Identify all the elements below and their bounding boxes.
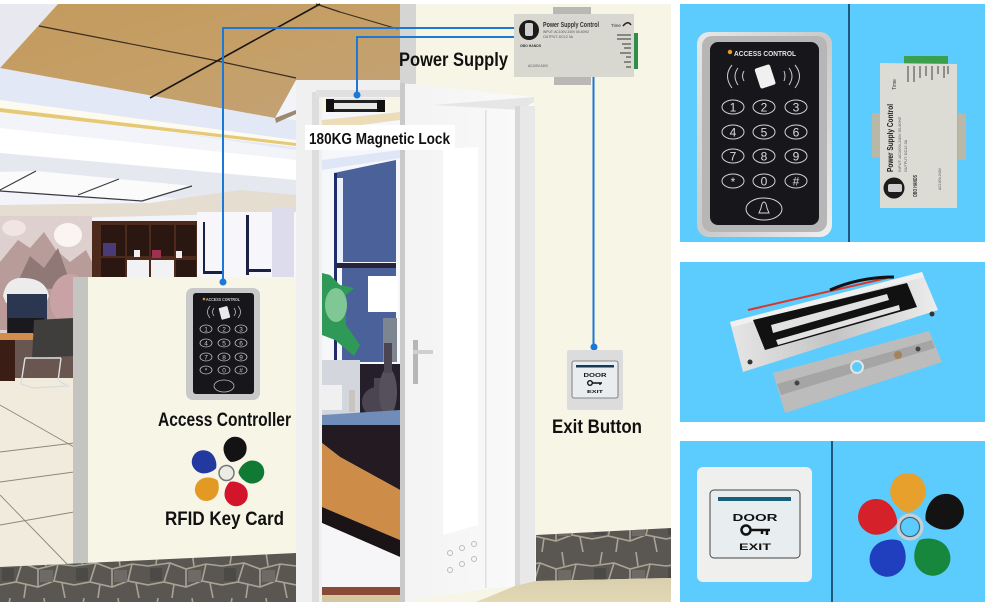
power supply unit (872, 56, 966, 208)
label: rfid key card: RFID Key Card (165, 509, 284, 530)
label: power supply: Power Supply (399, 50, 508, 71)
power supply unit: OBO HANDS (913, 175, 919, 197)
keypad controller: 0 (761, 174, 768, 188)
exit button on wall (567, 350, 623, 410)
keypad controller: 7 (730, 150, 737, 164)
access controller on wall: 1 (204, 326, 208, 334)
access controller on wall: 7 (204, 354, 208, 362)
label: magnetic lock (305, 125, 455, 150)
keypad controller: 4 (730, 126, 737, 140)
power supply on wall: Time (611, 23, 621, 28)
label: access controller: Access Controller (158, 410, 291, 431)
keypad controller: # (793, 174, 800, 188)
access controller on wall: 8 (222, 354, 226, 362)
wooden ceiling (0, 4, 400, 123)
right wall (416, 4, 671, 529)
open door (400, 83, 535, 602)
power supply unit: Time (892, 79, 898, 90)
power supply on wall: Power Supply Control (543, 22, 599, 29)
stone base left (0, 553, 296, 602)
panel: magnetic lock (680, 262, 985, 422)
access controller on wall: 4 (204, 340, 208, 348)
power supply on wall: OUTPUT: DC12 3A (543, 35, 574, 39)
keypad controller: ACCESS CONTROL (734, 51, 797, 58)
power supply on wall: AC100V-240V (528, 64, 549, 68)
exit button: EXIT (739, 542, 772, 552)
key fobs (854, 473, 969, 584)
office desk and chairs (0, 278, 73, 388)
access controller on wall (186, 288, 260, 400)
power supply unit: Power Supply Control (885, 104, 895, 172)
mural (0, 220, 92, 330)
access controller on wall: 5 (222, 340, 226, 348)
keypad controller: 3 (793, 100, 800, 114)
panel: installation scene (0, 4, 671, 602)
grey column (400, 4, 416, 84)
label: exit button: Exit Button (552, 417, 642, 438)
access controller on wall: 0 (222, 368, 226, 374)
shelving unit (92, 221, 198, 278)
access controller on wall: 6 (239, 340, 243, 348)
armature plate (773, 331, 942, 413)
exit button (697, 467, 812, 582)
label: magnetic lock: 180KG Magnetic Lock (309, 131, 450, 148)
access controller on wall: 2 (222, 326, 226, 334)
floor left (0, 378, 74, 570)
electromagnetic lock (730, 272, 938, 372)
interior room seen through door (322, 112, 400, 602)
access controller on wall: 3 (239, 326, 243, 334)
keypad controller: 2 (761, 100, 768, 114)
window mullions (197, 207, 296, 277)
access controller on wall: 9 (239, 354, 243, 362)
power supply unit: AC100V-240V (938, 167, 942, 190)
keypad controller (697, 32, 832, 237)
power supply on wall (514, 7, 638, 85)
left door frame (296, 80, 400, 602)
floor right (476, 578, 671, 602)
keypad controller: 5 (761, 126, 768, 140)
power supply unit: OUTPUT: DC12 3A (903, 140, 908, 172)
icon: rfid key fobs small (188, 434, 265, 510)
power supply unit: INPUT: AC100V-240V 50-60HZ (897, 116, 902, 172)
keypad controller: 1 (730, 100, 737, 114)
access controller on wall: * (205, 368, 208, 374)
exit button on wall: EXIT (587, 389, 603, 395)
panel: keypad and power supply (680, 4, 985, 242)
magnetic lock mounted on frame (326, 98, 385, 112)
lower left wall (73, 277, 296, 567)
power supply on wall: OBO HANDS (520, 43, 541, 48)
panel: exit button and key fobs (680, 441, 985, 602)
access controller on wall: # (239, 368, 243, 374)
left room background (0, 4, 300, 385)
keypad controller: 9 (793, 150, 800, 164)
blue wiring (220, 28, 596, 350)
keypad controller: * (731, 175, 736, 189)
power supply on wall: INPUT: AC100V-240V 50-60HZ (543, 30, 590, 34)
exit button on wall: DOOR (584, 373, 607, 379)
access controller on wall: ACCESS CONTROL (206, 297, 240, 303)
stone base right (536, 528, 671, 581)
exit button: DOOR (732, 512, 778, 524)
keypad controller: 6 (793, 126, 800, 140)
keypad controller: 8 (761, 150, 768, 164)
lock wires (748, 278, 887, 310)
